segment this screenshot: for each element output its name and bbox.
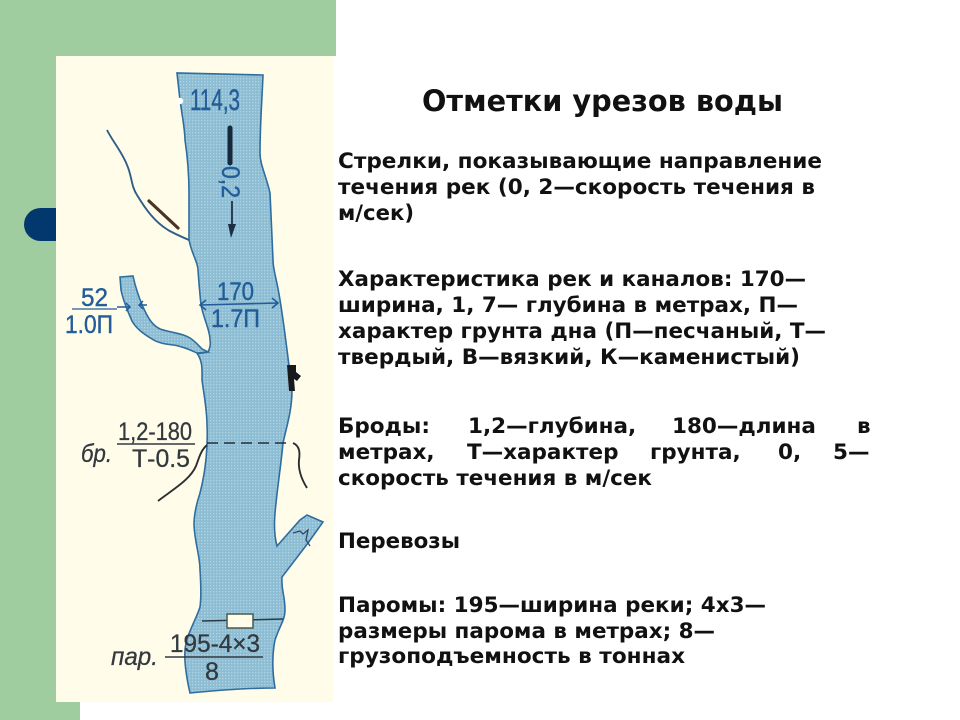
text: fords: грунта, (650, 440, 741, 465)
left dry stream line (107, 130, 189, 240)
ford label: 1,2-180 (118, 418, 192, 446)
ferry label: пар. (111, 643, 158, 671)
text: ferry boats (338, 593, 766, 669)
cream map background (56, 56, 333, 702)
black bank mark (287, 365, 301, 391)
text: fords: 180—длина (672, 414, 816, 439)
text: river characteristics: Характеристика рек и каналов: 170— (338, 267, 806, 292)
title: Отметки урезов воды (422, 84, 783, 118)
text: arrows: м/сек) (338, 201, 414, 226)
brown stream arrow (149, 201, 178, 228)
flow direction arrow with speed: 0,2 (216, 166, 244, 198)
ferry symbol (202, 614, 283, 628)
green top band (0, 0, 336, 56)
text: arrows: Стрелки, показывающие направление (338, 149, 822, 174)
text: river characteristics: характер грунта дна (П—песчаный, Т— (338, 319, 826, 344)
text: fords (338, 414, 871, 491)
text: river characteristics: твердый, В—вязкий, К—каменистый) (338, 345, 800, 370)
text: fords: в (857, 414, 871, 439)
text: arrows: течения рек (0, 2—скорость течения в (338, 175, 815, 200)
text: fords: метрах, (338, 440, 435, 465)
ford label: бр. (81, 440, 112, 468)
text: fords: 5— (833, 440, 869, 465)
river width label 170 / 1.7П: 170 (217, 278, 254, 306)
tributary width label 52 / 1.0П: 1.0П (65, 311, 113, 339)
text: fords: 0, (778, 440, 801, 465)
ferry label: 195-4×3 (170, 630, 260, 658)
river width label 170 / 1.7П (200, 278, 278, 333)
text: fords: Броды: (338, 414, 430, 439)
text: fords: 1,2—глубина, (468, 414, 636, 439)
flow direction arrow with speed (216, 128, 244, 238)
river width label 170 / 1.7П: 1.7П (211, 305, 260, 333)
water level mark (177, 84, 240, 117)
tributary width label 52 / 1.0П: 52 (81, 284, 108, 312)
water level mark: 114,3 (190, 84, 240, 117)
text: ferry boats: Паромы: 195—ширина реки; 4х3— (338, 593, 766, 618)
text: ferries heading: Перевозы (338, 529, 460, 554)
green left band (0, 0, 80, 720)
text: river characteristics: ширина, 1, 7— глубина в метрах, П— (338, 293, 798, 318)
river with tributaries (120, 73, 323, 693)
ferry label (111, 630, 263, 686)
text: river characteristics (338, 267, 826, 370)
text: arrows (338, 149, 822, 226)
navy rounded marker (24, 208, 74, 241)
ford label (81, 418, 307, 501)
tributary width label 52 / 1.0П (65, 284, 147, 339)
text: ferry boats: грузоподъемность в тоннах (338, 644, 685, 669)
rapids on small tributary (293, 530, 310, 546)
ferry label: 8 (205, 658, 219, 686)
text: fords: скорость течения в м/сек (338, 466, 652, 491)
text: fords: Т—характер (467, 440, 618, 465)
ford label: Т-0.5 (132, 445, 190, 473)
text: ferry boats: размеры парома в метрах; 8— (338, 619, 715, 644)
